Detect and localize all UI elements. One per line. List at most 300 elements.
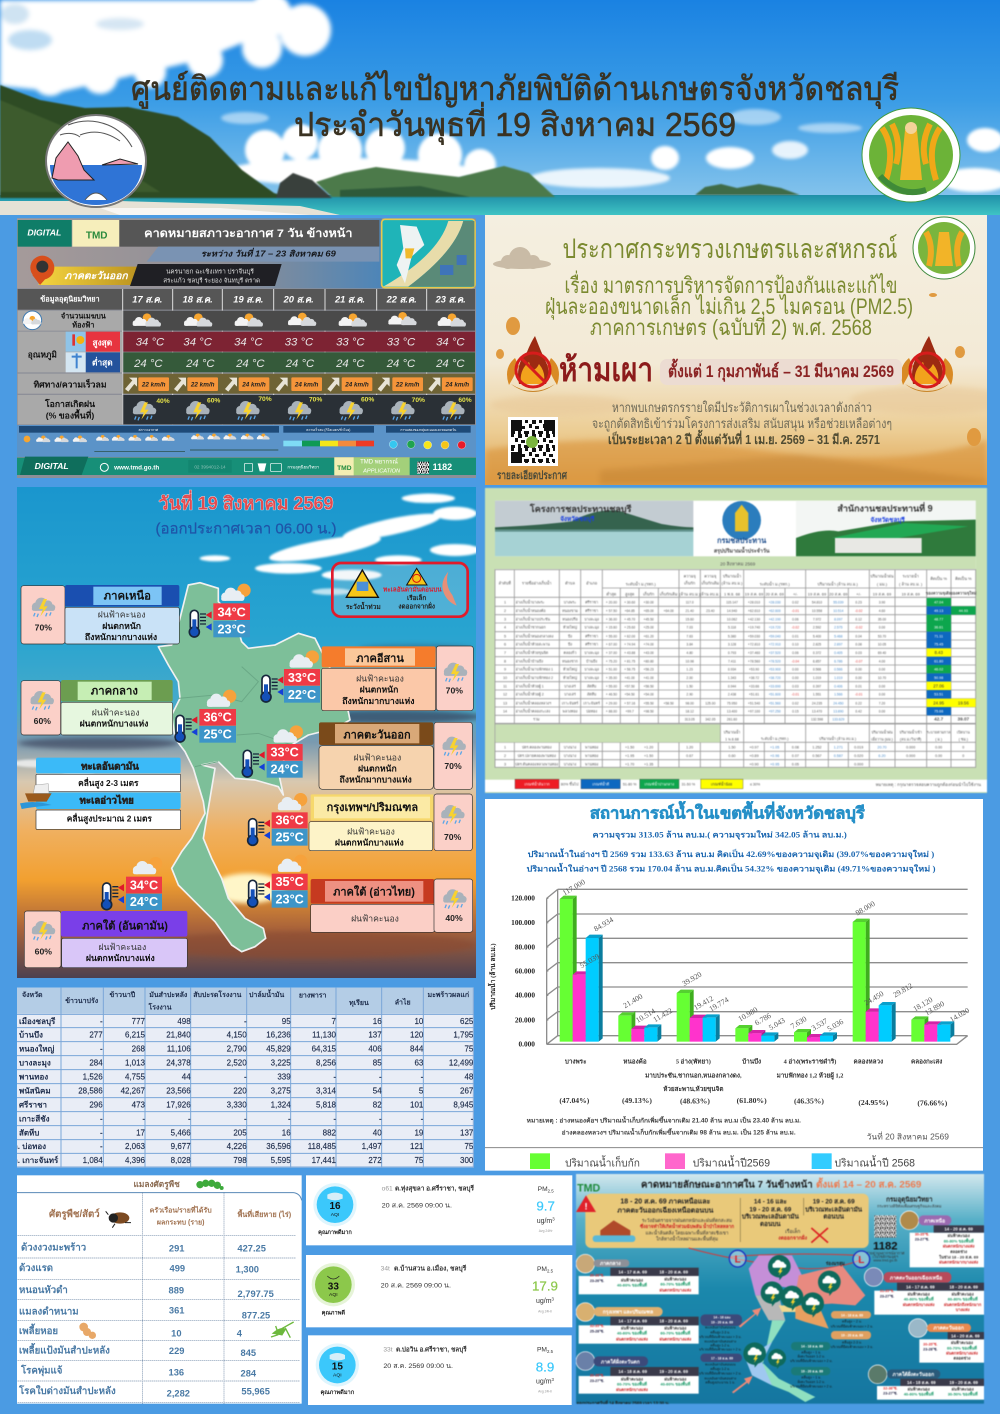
reservoir table: +51.600	[769, 693, 781, 697]
table column headings: ปริมาณน้ำฝน	[870, 571, 894, 578]
reservoir table: 7.411	[728, 659, 736, 663]
sea condition notes: Andaman: ทะเลอันดามันตอนบน	[705, 1362, 736, 1366]
reservoir table: +59.040	[769, 634, 781, 638]
card: south east coast: 23-27°ซ.	[883, 1391, 897, 1396]
crop figures: -	[421, 1115, 424, 1124]
card: east: ตลอดช่วง	[954, 1356, 970, 1361]
PM2.5 reading 8.9: PM	[537, 1347, 547, 1354]
reservoir table: 24.235	[812, 701, 822, 705]
reservoir table: ห้วยใหญ่	[563, 625, 577, 630]
small pumping stations rows: +1.95	[625, 754, 634, 758]
temperature: east	[242, 725, 303, 778]
reservoir table: บึง	[567, 643, 572, 647]
Royal Irrigation Department seal: กรมชลประทาน	[717, 536, 766, 545]
small pumping stations rows: ปริมาณน้ำเข้า	[899, 730, 922, 735]
reservoir table: 0.00	[879, 710, 885, 714]
left project photo banner: จังหวัดชลบุรี	[560, 515, 595, 523]
reservoir table: บางพระ	[564, 601, 576, 605]
station name and time: ต.ทุ่งสุขลา อ.ศรีราชา, ชลบุรี	[395, 1185, 474, 1193]
PM2.5 reading 8.9: 2.5	[547, 1349, 554, 1354]
panel: agricultural pests table	[17, 1175, 302, 1404]
PM2.5 reading 8.9: 3	[552, 1377, 555, 1382]
table rows: 27.06	[933, 683, 945, 688]
table column headings: เก็บกักเดิม	[701, 580, 720, 586]
table rows: 61.80	[934, 659, 943, 663]
icon: caterpillar	[196, 1180, 224, 1190]
rain chance row: 60%	[458, 397, 472, 404]
crop figures: 2,063	[125, 1142, 146, 1151]
status legend bar: หมายเหตุ : กรุณาตรวจสอบความถูกต้องก่อนนำไปใช้งาน	[876, 782, 981, 788]
reservoir table: 0.01	[855, 684, 862, 688]
panel: irrigation reservoir report	[484, 487, 988, 794]
temperature: Bangkok: 36°C	[276, 814, 304, 828]
reservoir names: คลองกะเสง	[911, 1059, 942, 1066]
damaged area: 2,797.75	[238, 1289, 274, 1299]
temperature rows: 33 °C	[285, 337, 314, 349]
reservoir table: + 37.00	[606, 651, 617, 655]
reservoir table: 13.890	[833, 710, 844, 714]
station name and time: ต.บ่อวิน อ.ศรีราชา, ชลบุรี	[396, 1345, 467, 1353]
small pumping stations rows: 0.05	[792, 762, 799, 766]
PM2.5 reading 8.9	[536, 1347, 555, 1393]
PM2.5 reading 17.9: 17.9	[532, 1279, 558, 1294]
damaged area: 284	[241, 1368, 257, 1378]
AQI badge 16: คุณภาพดีมาก	[318, 1229, 352, 1236]
table rows: 3	[504, 617, 506, 621]
crop figures: 498	[177, 1017, 191, 1026]
reservoir table: +61.20	[644, 634, 654, 638]
reservoir table: 10.558	[812, 609, 822, 613]
temperature rows: อุณหภูมิ	[28, 349, 57, 360]
announcement heading: ประกาศกระทรวงเกษตรและสหกรณ์	[562, 233, 898, 264]
temperature: northeast: 22°C	[288, 688, 316, 702]
legend strip: สภาวะอากาศ	[139, 428, 159, 432]
crop figures: 63	[414, 1059, 424, 1068]
reservoir table: +33.690	[769, 684, 781, 688]
pest rows	[18, 1242, 116, 1397]
reservoir table: 133.629	[832, 717, 844, 721]
rain chance row: 70%	[412, 397, 425, 404]
reservoir table: 125.00	[705, 701, 716, 705]
percent of capacity row: (61.80%)	[737, 1096, 767, 1105]
card: north	[900, 1211, 984, 1267]
reservoir table: +43.00	[644, 651, 654, 655]
warning summary box: 19 - 20 ส.ค. 69	[813, 1199, 855, 1206]
south Gulf region box: ฝนฟ้าคะนอง	[351, 914, 399, 924]
temperature: central	[175, 690, 236, 743]
PM2.5 reading 17.9: PM	[537, 1266, 547, 1273]
district names: บ้านบึง	[19, 1030, 43, 1040]
y axis scale: 60.000	[515, 966, 535, 975]
table column headings: คิดเป็น %	[955, 575, 972, 581]
reservoir table: ห้วยใหญ่	[563, 667, 577, 672]
warning callout	[332, 563, 468, 617]
regional map	[745, 1255, 865, 1402]
reservoir table: อ่างเก็บน้ำบางพระ	[516, 599, 545, 605]
crop figures: 3,225	[271, 1059, 291, 1068]
south Andaman region box: ภาคใต้ (อันดามัน)	[82, 918, 168, 932]
bar value labels: 117.000	[561, 877, 587, 897]
table column headings: 19 ส.ค. 69	[808, 591, 827, 596]
table rows: 75.45	[934, 643, 943, 647]
reservoir table: 5.118	[728, 626, 736, 630]
sea condition notes: Gulf: 19 - 20 ส.ค. 69	[801, 1369, 823, 1373]
temperature: central: 25°C	[204, 728, 232, 742]
reservoir table: -0.01	[855, 693, 863, 697]
table rows: 71.11	[934, 634, 943, 638]
PM2.5 reading 17.9: 3	[552, 1297, 555, 1302]
wind row: 22 km/h	[395, 382, 420, 389]
table column headings: ปริมาณน้ำ	[723, 571, 741, 578]
sea condition notes: Gulf: บริเวณที่มีฝนฟ้าคะนอง > 2 ม.	[831, 1323, 873, 1328]
table column headings: +/-	[793, 591, 798, 596]
reservoir table: 18.12	[685, 710, 694, 714]
northeast region box: ภาคอีสาน	[356, 652, 404, 665]
reservoir names: ห้วยสะพาน,ห้วยขุนจิต	[663, 1084, 723, 1093]
sea condition notes: Gulf: คลื่นสูง ~ 1 ม.	[801, 1350, 821, 1355]
south Andaman region box: 60%	[35, 947, 52, 957]
reservoir table: 2.575	[834, 626, 843, 630]
reservoir table: +97.250	[769, 710, 781, 714]
small pumping stations rows: 0.020	[854, 754, 863, 758]
reservoir table: -0.01	[792, 609, 799, 613]
sea condition notes: Gulf	[790, 1311, 873, 1388]
crop figures: 85	[373, 1059, 382, 1068]
small pumping stations rows: ปตร.ต้นคลองหลวงพานทอง	[515, 761, 558, 766]
warning summary box: ตอนบน	[760, 1221, 781, 1228]
small pumping stations rows: ( ม.)	[935, 737, 942, 741]
crop figures: 28,586	[78, 1087, 103, 1096]
reservoir table: 10.05	[878, 643, 886, 647]
small pumping stations rows: 0.587	[834, 754, 843, 758]
card: central: 18 - 20 ส.ค. 69	[659, 1270, 689, 1275]
card: central: ฝนตกหนักบางแห่ง	[659, 1286, 691, 1292]
footer bar with contacts: www.tmd.go.th	[113, 465, 159, 472]
cloud cover row	[18, 311, 475, 331]
crop figures: 277	[89, 1031, 103, 1040]
warning summary box: บริเวณทะเลอันดามัน	[805, 1205, 863, 1213]
legend strip: ความเร็วลม (กิโลเมตร/ชั่วโมง)	[306, 426, 350, 432]
small pumping stations rows: 0	[962, 754, 964, 758]
Bangkok region box: 70%	[444, 832, 462, 842]
crop figures: 2,520	[227, 1059, 247, 1068]
card: south east coast	[868, 1365, 984, 1400]
footer bar with contacts	[17, 457, 477, 475]
reservoir table: หนองชาก	[562, 658, 578, 663]
AQI badge 16: AQI	[331, 1212, 339, 1218]
y axis scale: 40.000	[515, 991, 535, 1000]
table column headings: (ล้าน ลบ.ม.)	[722, 581, 743, 586]
temperature rows: 33 °C	[387, 337, 416, 349]
crop figures: -	[244, 1115, 247, 1124]
reservoir table: 98.00	[685, 701, 694, 705]
reservoir table: +37.460	[748, 651, 760, 655]
reservoir table: +19.740	[748, 626, 760, 630]
small pumping stations rows: 1.252	[812, 746, 822, 750]
reservoir names: มาบประชัน,ชากนอก,หนองกลางดง,	[645, 1072, 742, 1080]
reservoir table: +80.80	[644, 659, 654, 663]
reservoir table: +57.50	[625, 684, 635, 688]
table column headings: +/-	[856, 591, 862, 596]
reservoir table: 0.12	[855, 617, 862, 621]
card: Bangkok: กรุงเทพฯ และปริมณฑล	[603, 1309, 653, 1316]
table column headings: อำเภอ	[586, 581, 598, 586]
card: south west coast: 19 - 20 ส.ค. 69	[659, 1369, 689, 1374]
reservoir table: +38.720	[769, 676, 781, 680]
table rows: 5	[504, 634, 506, 638]
reservoir table: 0.06	[792, 617, 799, 621]
affected households: 361	[169, 1306, 184, 1316]
crop figures: -	[379, 1073, 382, 1082]
crop figures: 75	[414, 1156, 424, 1165]
small pumping stations rows: ปตร.ปลายคลองพานทอง	[517, 753, 556, 758]
crop figures: 45,829	[266, 1045, 291, 1054]
hotline and QR: เว็บไซต์กรมอุตุฯ	[873, 1253, 898, 1260]
pests table headings: พื้นที่เสียหาย (ไร่)	[237, 1208, 292, 1219]
card: central: ภาคกลาง	[600, 1261, 621, 1267]
reservoir table: +53.900	[769, 668, 781, 672]
small pumping stations rows: +1.70	[625, 762, 634, 766]
table column headings: ปริมาณน้ำ (ล้าน ลบ.ม.)	[818, 580, 858, 587]
reservoir table: 115.147	[726, 601, 738, 605]
crop figures: 1,013	[125, 1059, 146, 1068]
reservoir table: อ่างเก็บน้ำห้วยสะพาน	[516, 641, 550, 647]
PM2.5 reading 17.9: ug/m	[536, 1298, 552, 1305]
bar value labels: 29.812	[891, 981, 914, 999]
reservoir table: 0.406	[834, 684, 843, 688]
card: south west coast: ฝนตกหนักบางแห่ง	[616, 1386, 648, 1392]
crop figures: 11,106	[167, 1045, 191, 1054]
temperature: north: 34°C	[218, 605, 246, 619]
affected households: 10	[171, 1328, 182, 1338]
table column headings: 19 ส.ค. 69	[873, 591, 892, 596]
reservoir table: -0.04	[792, 659, 799, 663]
card: air quality station 34t	[306, 1255, 572, 1328]
card: Bangkok: 14 - 17 ส.ค. 69	[618, 1319, 648, 1324]
reservoir table: 261.60	[727, 717, 737, 721]
sea condition notes: Gulf: บริเวณที่มีฝนฟ้าคะนอง > 3 ม.	[831, 1344, 873, 1349]
burn ban dates	[660, 358, 902, 385]
crop figures: 7	[332, 1017, 337, 1026]
bar chart	[487, 877, 971, 1049]
pest rows: โรคพุ่มแจ้	[20, 1364, 63, 1376]
reservoir table: 69.40	[878, 651, 886, 655]
north region box: ภาคเหนือ	[104, 589, 151, 602]
station name and time: 34t	[381, 1266, 390, 1273]
warning callout: ระวังน้ำท่วม	[346, 601, 381, 611]
warning callout: เรือเล็ก	[407, 593, 426, 602]
crop figures: 284	[89, 1059, 103, 1068]
reservoir table: +62.610	[748, 609, 760, 613]
temperature: north: 23°C	[218, 622, 246, 636]
small pumping stations rows: ปริมาณน้ำฝน	[871, 730, 893, 735]
icon: larva	[79, 1323, 96, 1339]
reservoir table: 0.03	[855, 651, 862, 655]
table column headings: ตำบล	[565, 581, 575, 586]
crop figures: -	[471, 1115, 474, 1124]
table column headings: ความจุ	[704, 573, 716, 579]
right office photo banner: จังหวัดชลบุรี	[871, 516, 905, 524]
reservoir table: + 25.60	[624, 626, 635, 630]
legend strip	[17, 425, 477, 457]
table column headings: (ล้าน ลบ.ม.)	[679, 591, 701, 596]
reservoir table: +42.130	[748, 617, 760, 621]
table rows: 42.7	[934, 717, 944, 722]
crop figures: 64,315	[312, 1045, 337, 1054]
card: south west coast	[576, 1352, 699, 1394]
warning summary box: และน้ำล้นตลิ่ง โดยเฉพาะพื้นที่ลาดเชิงเขา	[645, 1229, 729, 1235]
Royal Irrigation Department seal	[714, 501, 770, 555]
reservoir table: อ่างเก็บน้ำคลองกะเสง	[516, 708, 550, 714]
pests table headings	[49, 1205, 292, 1227]
temperature rows: 33 °C	[336, 337, 365, 349]
small pumping stations rows: 0.000	[906, 746, 915, 750]
table rows: 7	[504, 651, 506, 655]
small pumping stations rows: พานทอง	[585, 762, 599, 766]
affected households	[167, 1243, 190, 1398]
card: Bangkok: ฝนฟ้าคะนอง	[621, 1324, 643, 1330]
reservoir table: 0.10	[792, 643, 799, 647]
crop figures: 4,150	[227, 1031, 247, 1040]
reservoir table: 2.592	[813, 626, 821, 630]
hotline and QR: กรมอุตุนิยมวิทยา	[886, 1195, 933, 1203]
Bangkok region box	[309, 794, 472, 851]
table rows: 24.95	[933, 700, 945, 705]
card: north: 60-80% ของพื้นที่	[944, 1236, 974, 1243]
bar value labels: 7.630	[789, 1014, 808, 1031]
crop figures: -	[100, 1017, 103, 1026]
table header row: 21 ส.ค.	[334, 295, 365, 305]
temperature: south Gulf: 23°C	[276, 892, 304, 906]
wind row: 24 km/h	[294, 382, 319, 389]
percent of capacity row: (48.63%)	[680, 1096, 710, 1105]
reservoir table: + 81.75	[624, 659, 635, 663]
reservoir table: 13.470	[812, 710, 822, 714]
crop figures: 48	[464, 1073, 474, 1082]
crop figures: 4,396	[125, 1156, 146, 1165]
reservoir table: 0.00	[792, 676, 799, 680]
reservoir table: 5.468	[834, 634, 843, 638]
reservoir table: +28.010	[748, 601, 760, 605]
station name and time: 20 ส.ค. 2569 09:00 น.	[381, 1282, 451, 1289]
footer bar with contacts: TMD พยากรณ์	[360, 458, 398, 466]
reservoir table: 0.934	[728, 668, 736, 672]
PM2.5 reading 9.7: 2.5	[548, 1188, 554, 1193]
crop figures: 267	[460, 1087, 474, 1096]
temperature rows: 34 °C	[436, 337, 465, 349]
reservoir table: + 36.00	[606, 617, 617, 621]
reservoir table: 21.40	[685, 609, 694, 613]
reservoir table: 2.825	[813, 643, 821, 647]
small pumping stations rows: 0.000	[906, 754, 915, 758]
table column headings: ระดับน้ำ ม.(รทก.)	[760, 580, 790, 587]
crop figures: 8,945	[453, 1101, 474, 1110]
north region box: ฝนฟ้าคะนอง	[98, 610, 146, 620]
reservoir table: พลวงทอง	[563, 710, 578, 714]
footer bar with contacts: TMD	[337, 465, 352, 472]
district names: บางละมุง	[19, 1059, 51, 1069]
crop figures: -	[421, 1073, 424, 1082]
reservoir table: 2.90	[686, 693, 693, 697]
reservoir table: + 88.00	[606, 710, 617, 714]
rain chance row: โอกาสเกิดฝน	[44, 398, 95, 409]
bar value labels: 11.422	[651, 1006, 674, 1024]
small pumping stations rows: 1.20	[686, 746, 693, 750]
crop figures: 9,677	[171, 1142, 191, 1151]
y axis scale: 80.000	[515, 942, 535, 951]
region label and provinces: ภาคตะวันออก	[64, 270, 129, 282]
date strip: ระหว่าง วันที่ 17 – 23 สิงหาคม 69	[201, 247, 336, 258]
table rows: 46.02	[934, 668, 943, 672]
reservoir table: 35.00	[878, 617, 886, 621]
small pumping stations rows: 0.000	[854, 762, 863, 766]
crop figures: 268	[132, 1045, 146, 1054]
warning summary box: บริเวณทะเลอันดามัน	[742, 1213, 799, 1221]
outlook heading	[641, 1177, 921, 1190]
hotline and QR	[866, 1195, 942, 1262]
card: east: 60-70% ของพื้นที่	[947, 1343, 977, 1350]
right office photo banner: สำนักงานชลประทานที่ 9	[837, 501, 933, 513]
reservoir table: +59.030	[748, 634, 760, 638]
card: south east coast: ฝนฟ้าคะนอง	[952, 1385, 974, 1391]
reservoir table: 4.60	[879, 609, 885, 613]
icon: grasshopper	[271, 1322, 294, 1338]
card: south east coast: 32-36°ซ.	[883, 1385, 897, 1390]
sea condition notes: Andaman: ทะเลอันดามันตอนล่าง	[704, 1340, 737, 1344]
card: Bangkok: ฝนตกหนักบางแห่ง	[659, 1335, 691, 1341]
bar value labels: 6.786	[753, 1011, 773, 1027]
pest rows: ด้วงงวงมะพร้าว	[21, 1242, 86, 1254]
sea condition notes: Andaman: คลื่นสูง 1-2 ม.	[710, 1343, 730, 1348]
footer bar with contacts: กรมอุตุนิยมวิทยา	[287, 464, 320, 470]
chart legend	[485, 1148, 983, 1170]
reservoir table: สัตหีบ	[587, 692, 597, 697]
reservoir table: อ่างเก็บน้ำคลองหลวงฯ	[516, 699, 551, 705]
Bangkok region box: ฝนตกหนักบางแห่ง	[335, 838, 404, 848]
warning summary box: เรือเล็ก	[785, 1227, 800, 1235]
crop figures: 16	[282, 1128, 291, 1137]
sea condition notes: Gulf: บริเวณที่มีฝนฟ้าคะนอง > 2 ม.	[790, 1358, 833, 1363]
district names: พนัสนิคม	[19, 1087, 51, 1096]
percent of capacity row: (49.13%)	[622, 1096, 652, 1105]
reservoir table: +74.00	[644, 643, 654, 647]
crop figures	[78, 1017, 474, 1165]
table rows: 19.56	[958, 700, 969, 705]
PM2.5 reading 9.7: Avg 24Hr	[539, 1229, 553, 1233]
table rows: 2	[504, 609, 506, 613]
card: air quality station 061	[306, 1175, 572, 1246]
small pumping stations rows: ระดับน้ำ ม.(รทก.)	[761, 736, 788, 741]
card: south east coast: ภาคใต้ฝั่งตะวันออก	[893, 1370, 934, 1378]
central region box: 60%	[34, 716, 51, 726]
card: north: ตลอดช่วง	[950, 1249, 967, 1254]
reservoir names: บ้านบึง	[742, 1057, 761, 1066]
card: Bangkok: 18 - 20 ส.ค. 69	[659, 1319, 689, 1324]
reservoir table: 1.019	[813, 676, 821, 680]
card: air quality station 33t	[308, 1335, 572, 1405]
district names: สัตหีบ	[19, 1127, 39, 1137]
small pumping stations rows: บางนาง	[564, 762, 576, 766]
PM2.5 reading 9.7: 9.7	[536, 1199, 555, 1214]
affected households: 889	[169, 1286, 184, 1296]
reservoir table: 10.062	[727, 617, 737, 621]
low pressure markers	[729, 1250, 870, 1268]
small pumping stations rows: 0.019	[854, 746, 863, 750]
reservoir table: บางละมุง	[584, 617, 599, 622]
reservoir names: บางพระ	[565, 1059, 586, 1066]
card: northeast: 40-60% ของพื้นที่	[904, 1295, 934, 1302]
reservoir table: 1.551	[813, 693, 821, 697]
